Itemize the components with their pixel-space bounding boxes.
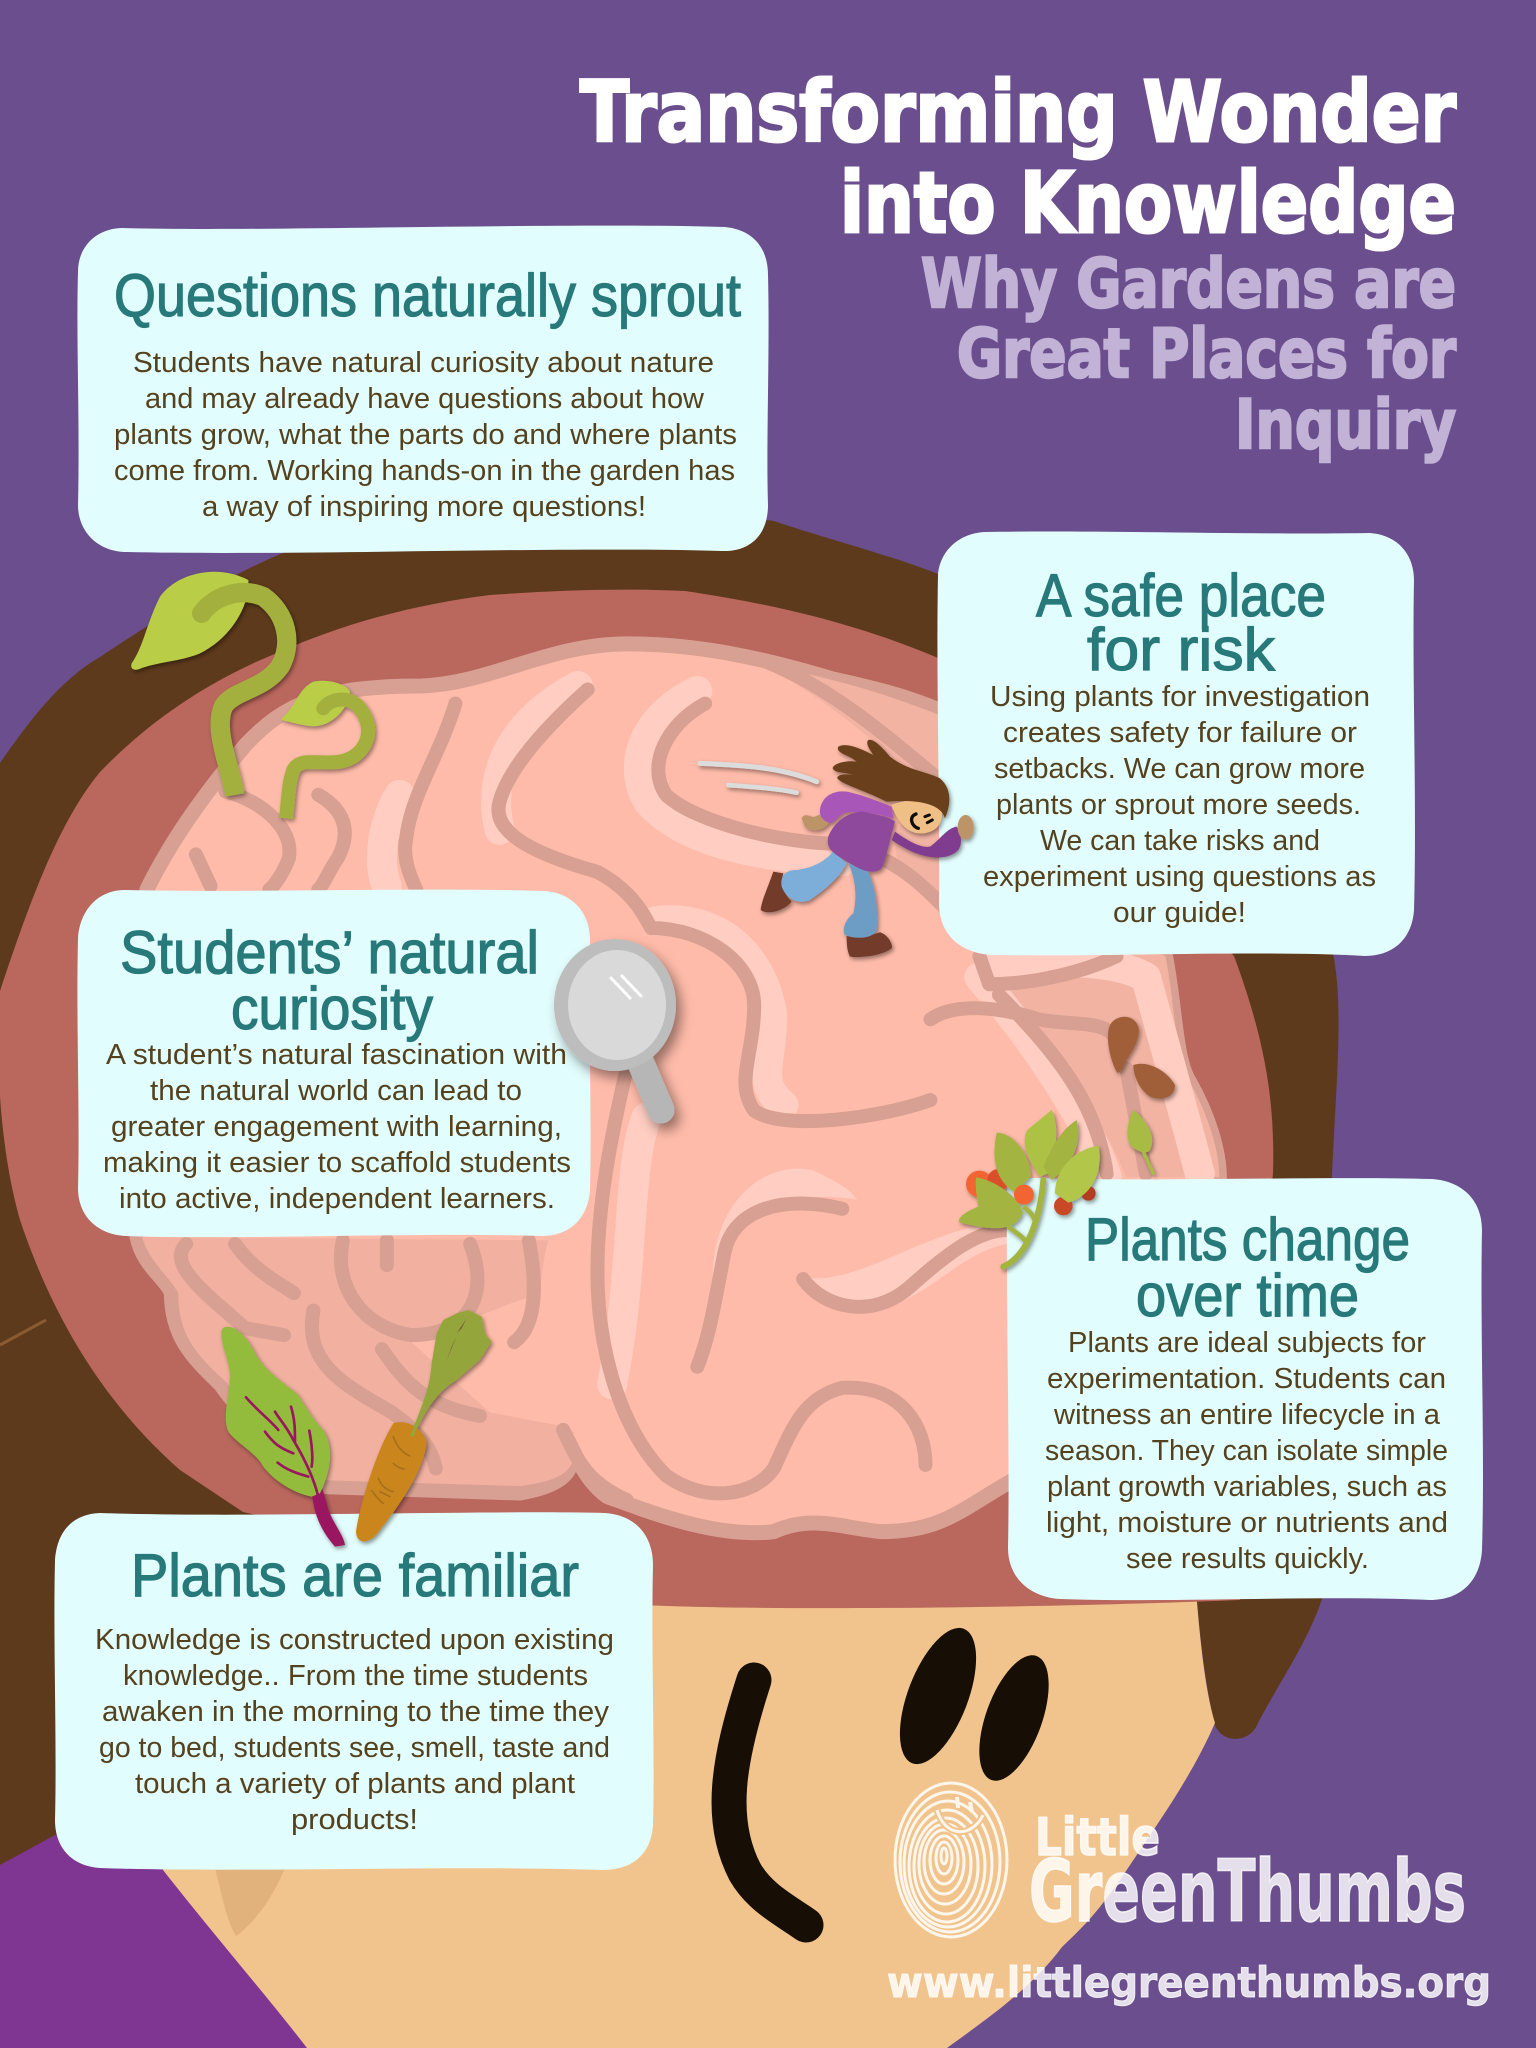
heading: Plants are familiar — [131, 1542, 579, 1609]
hair — [0, 503, 1339, 1865]
body text: see results quickly. — [1126, 1543, 1369, 1575]
body text: plant growth variables, such as — [1047, 1471, 1447, 1503]
title — [580, 63, 1456, 252]
face: right eye — [965, 1646, 1063, 1790]
icon: sprouts — [131, 572, 368, 818]
body text: go to bed, students see, smell, taste and — [99, 1732, 610, 1764]
body text: into active, independent learners. — [119, 1183, 555, 1215]
card background — [77, 890, 591, 1237]
body text: greater engagement with learning, — [111, 1111, 562, 1143]
heading: over time — [1136, 1262, 1359, 1329]
sulci — [181, 663, 1146, 1500]
body text: We can take risks and — [1040, 825, 1320, 857]
panel: students' natural curiosity — [77, 890, 591, 1237]
body text: awaken in the morning to the time they — [102, 1696, 609, 1728]
light folds — [382, 686, 1200, 1384]
brain outline — [137, 644, 1219, 1533]
body text: a way of inspiring more questions! — [202, 491, 646, 523]
heading — [1085, 1206, 1410, 1329]
logo wordmark: Little — [1035, 1808, 1160, 1868]
body text — [983, 681, 1376, 929]
icon: magnifying glass — [554, 939, 676, 1110]
body text: creates safety for failure or — [1003, 717, 1357, 749]
subtitle: Inquiry — [1235, 386, 1456, 465]
heading: Students’ natural — [120, 919, 539, 986]
neck shadow — [215, 1868, 285, 1936]
body text: Plants are ideal subjects for — [1068, 1327, 1426, 1359]
hair strand — [0, 1320, 46, 1345]
cerebellum tone — [142, 1237, 575, 1486]
body text: our guide! — [1113, 897, 1246, 929]
body text: touch a variety of plants and plant — [135, 1768, 575, 1800]
heading: Plants change — [1085, 1206, 1410, 1273]
website url: www.littlegreenthumbs.org — [887, 1958, 1491, 2007]
body text: witness an entire lifecycle in a — [1053, 1399, 1441, 1431]
heading: A safe place — [1036, 562, 1326, 629]
icon: running girl — [700, 740, 974, 957]
body text: light, moisture or nutrients and — [1046, 1507, 1448, 1539]
body text: and may already have questions about how — [145, 383, 705, 415]
lower lobe tone — [411, 1289, 627, 1440]
body text: plants grow, what the parts do and where plants — [114, 419, 737, 451]
body text: products! — [291, 1804, 418, 1836]
body text: the natural world can lead to — [150, 1075, 522, 1107]
heading: curiosity — [231, 975, 433, 1042]
body text: plants or sprout more seeds. — [996, 789, 1361, 821]
body text — [114, 347, 737, 523]
body text: season. They can isolate simple — [1045, 1435, 1448, 1467]
body text: knowledge.. From the time students — [123, 1660, 588, 1692]
panel: questions naturally sprout — [77, 226, 769, 553]
icon: fingerprint logo — [895, 1783, 1007, 1937]
card background — [54, 1512, 654, 1870]
face: mouth — [729, 1680, 806, 1925]
face: left eye — [884, 1618, 992, 1774]
body text: Knowledge is constructed upon existing — [95, 1624, 614, 1656]
body text: experiment using questions as — [983, 861, 1376, 893]
subtitle — [921, 245, 1456, 465]
panel: plants change over time — [1007, 1178, 1483, 1600]
icon: chard leaf and carrot — [221, 1310, 492, 1547]
card background — [77, 226, 769, 553]
brain — [137, 644, 1219, 1533]
heading: for risk — [1087, 616, 1276, 683]
icon: seeds and sprig — [959, 1017, 1175, 1267]
card background — [1007, 1178, 1483, 1600]
heading: Questions naturally sprout — [114, 262, 741, 329]
body text: making it easier to scaffold students — [103, 1147, 571, 1179]
panel: plants are familiar — [54, 1512, 654, 1870]
body text: A student’s natural fascination with — [106, 1039, 567, 1071]
card background — [937, 532, 1415, 956]
shirt — [0, 1835, 307, 2048]
body text: setbacks. We can grow more — [994, 753, 1365, 785]
face — [163, 1590, 1215, 2048]
heading — [120, 919, 539, 1042]
body text: Students have natural curiosity about nature — [133, 347, 714, 379]
body text — [1045, 1327, 1448, 1575]
logo wordmark — [1029, 1808, 1466, 1942]
body text: experimentation. Students can — [1047, 1363, 1446, 1395]
body text: Using plants for investigation — [990, 681, 1370, 713]
upper right tone — [764, 665, 1219, 1177]
scalp — [0, 590, 1273, 1608]
heading — [1036, 562, 1326, 683]
body text — [103, 1039, 571, 1215]
body text — [95, 1624, 614, 1836]
panel: a safe place for risk — [937, 532, 1415, 956]
body text: come from. Working hands-on in the garden has — [114, 455, 735, 487]
